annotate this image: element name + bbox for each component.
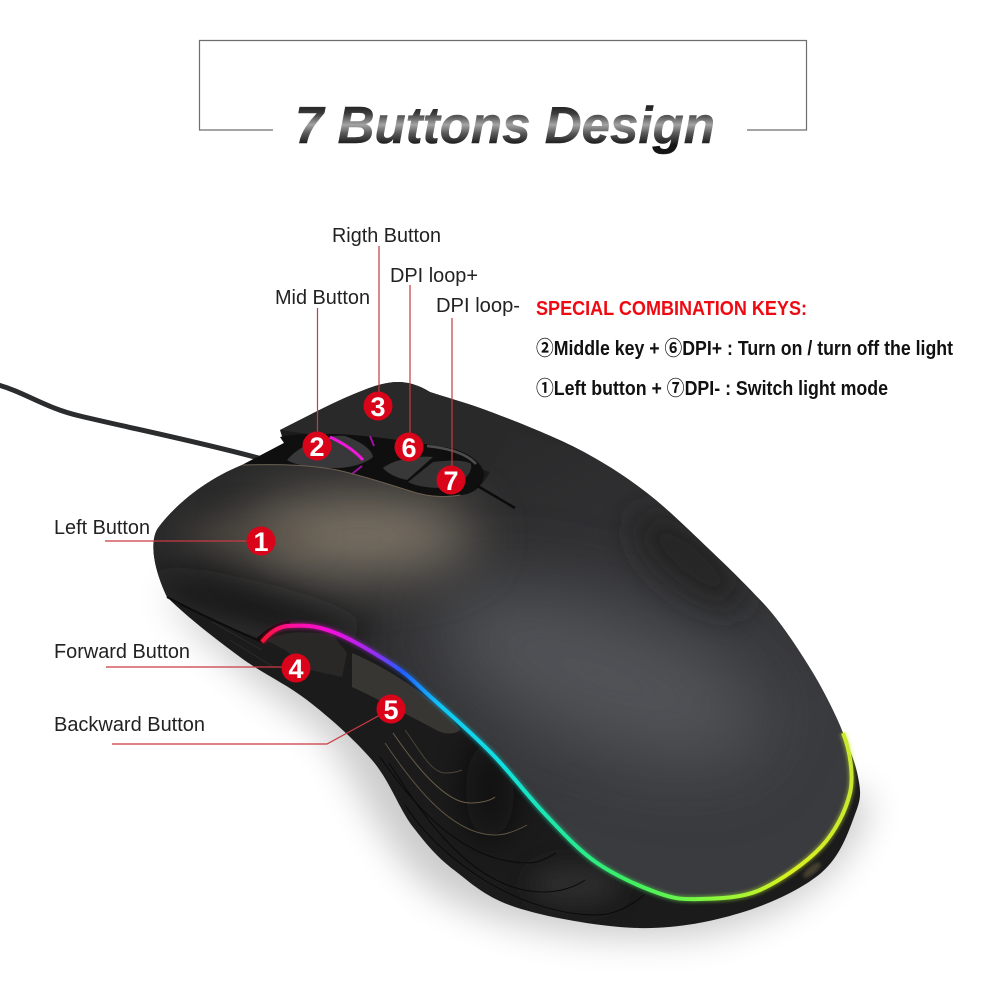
badge 4: 4 bbox=[288, 654, 304, 684]
callout lines bbox=[105, 246, 452, 744]
wheel light accents bbox=[352, 436, 374, 474]
combination: turn light on or off: ②Middle key + ⑥DPI+ : Turn on / turn off the light bbox=[536, 337, 953, 360]
skirt rim highlight bbox=[802, 862, 822, 879]
side button forward bbox=[268, 632, 347, 677]
badge 6 bbox=[394, 432, 424, 463]
side button backward bbox=[352, 653, 460, 734]
label: Rigth Button: Rigth Button bbox=[332, 225, 441, 247]
badge 3 bbox=[364, 392, 392, 422]
badge 3: 3 bbox=[370, 392, 386, 422]
mouse shadow bbox=[160, 590, 872, 938]
label: Backward Button: Backward Button bbox=[54, 714, 205, 736]
sensor slot bbox=[476, 485, 515, 508]
label: DPI loop-: DPI loop- bbox=[436, 295, 520, 317]
rgb light strip bbox=[262, 626, 852, 899]
mouse body silhouette bbox=[153, 382, 860, 928]
side skirt shading bbox=[530, 865, 620, 905]
badge 4 bbox=[282, 654, 310, 684]
dpi plus button bbox=[383, 457, 433, 480]
badge 2 bbox=[302, 432, 332, 462]
top button recess bbox=[242, 434, 484, 497]
title: 7 Buttons Design bbox=[295, 97, 715, 155]
title frame bbox=[200, 40, 806, 130]
rear hump bbox=[280, 382, 594, 472]
scroll wheel bbox=[287, 436, 373, 468]
thumb recess shadow bbox=[258, 623, 290, 640]
dpi minus button bbox=[408, 461, 471, 488]
shell seam highlight bbox=[242, 465, 460, 497]
mouse bbox=[140, 370, 860, 928]
combination keys text bbox=[536, 298, 953, 400]
badge 7 bbox=[436, 466, 466, 496]
combination: switch light mode: ①Left button + ⑦DPI- : Switch light mode bbox=[536, 377, 888, 400]
badge 5: 5 bbox=[383, 695, 399, 725]
shell lower seam bbox=[167, 597, 262, 642]
label: DPI loop+: DPI loop+ bbox=[390, 265, 478, 287]
badge 1 bbox=[246, 526, 276, 557]
label: Mid Button: Mid Button bbox=[275, 287, 370, 309]
side grooves bbox=[212, 622, 644, 915]
combination keys heading: SPECIAL COMBINATION KEYS: bbox=[536, 298, 807, 320]
badge 2: 2 bbox=[309, 432, 325, 462]
main shell bbox=[153, 430, 852, 899]
badge 1: 1 bbox=[253, 527, 269, 557]
label: Forward Button: Forward Button bbox=[54, 641, 190, 663]
label: Left Button: Left Button bbox=[54, 517, 150, 539]
cable bbox=[0, 384, 262, 459]
badge 5 bbox=[376, 694, 406, 725]
dpi top ridge bbox=[427, 446, 476, 464]
shell highlights bbox=[140, 492, 788, 801]
scroll wheel light bbox=[330, 437, 363, 460]
badge 7: 7 bbox=[443, 466, 459, 496]
badge 6: 6 bbox=[401, 433, 417, 463]
